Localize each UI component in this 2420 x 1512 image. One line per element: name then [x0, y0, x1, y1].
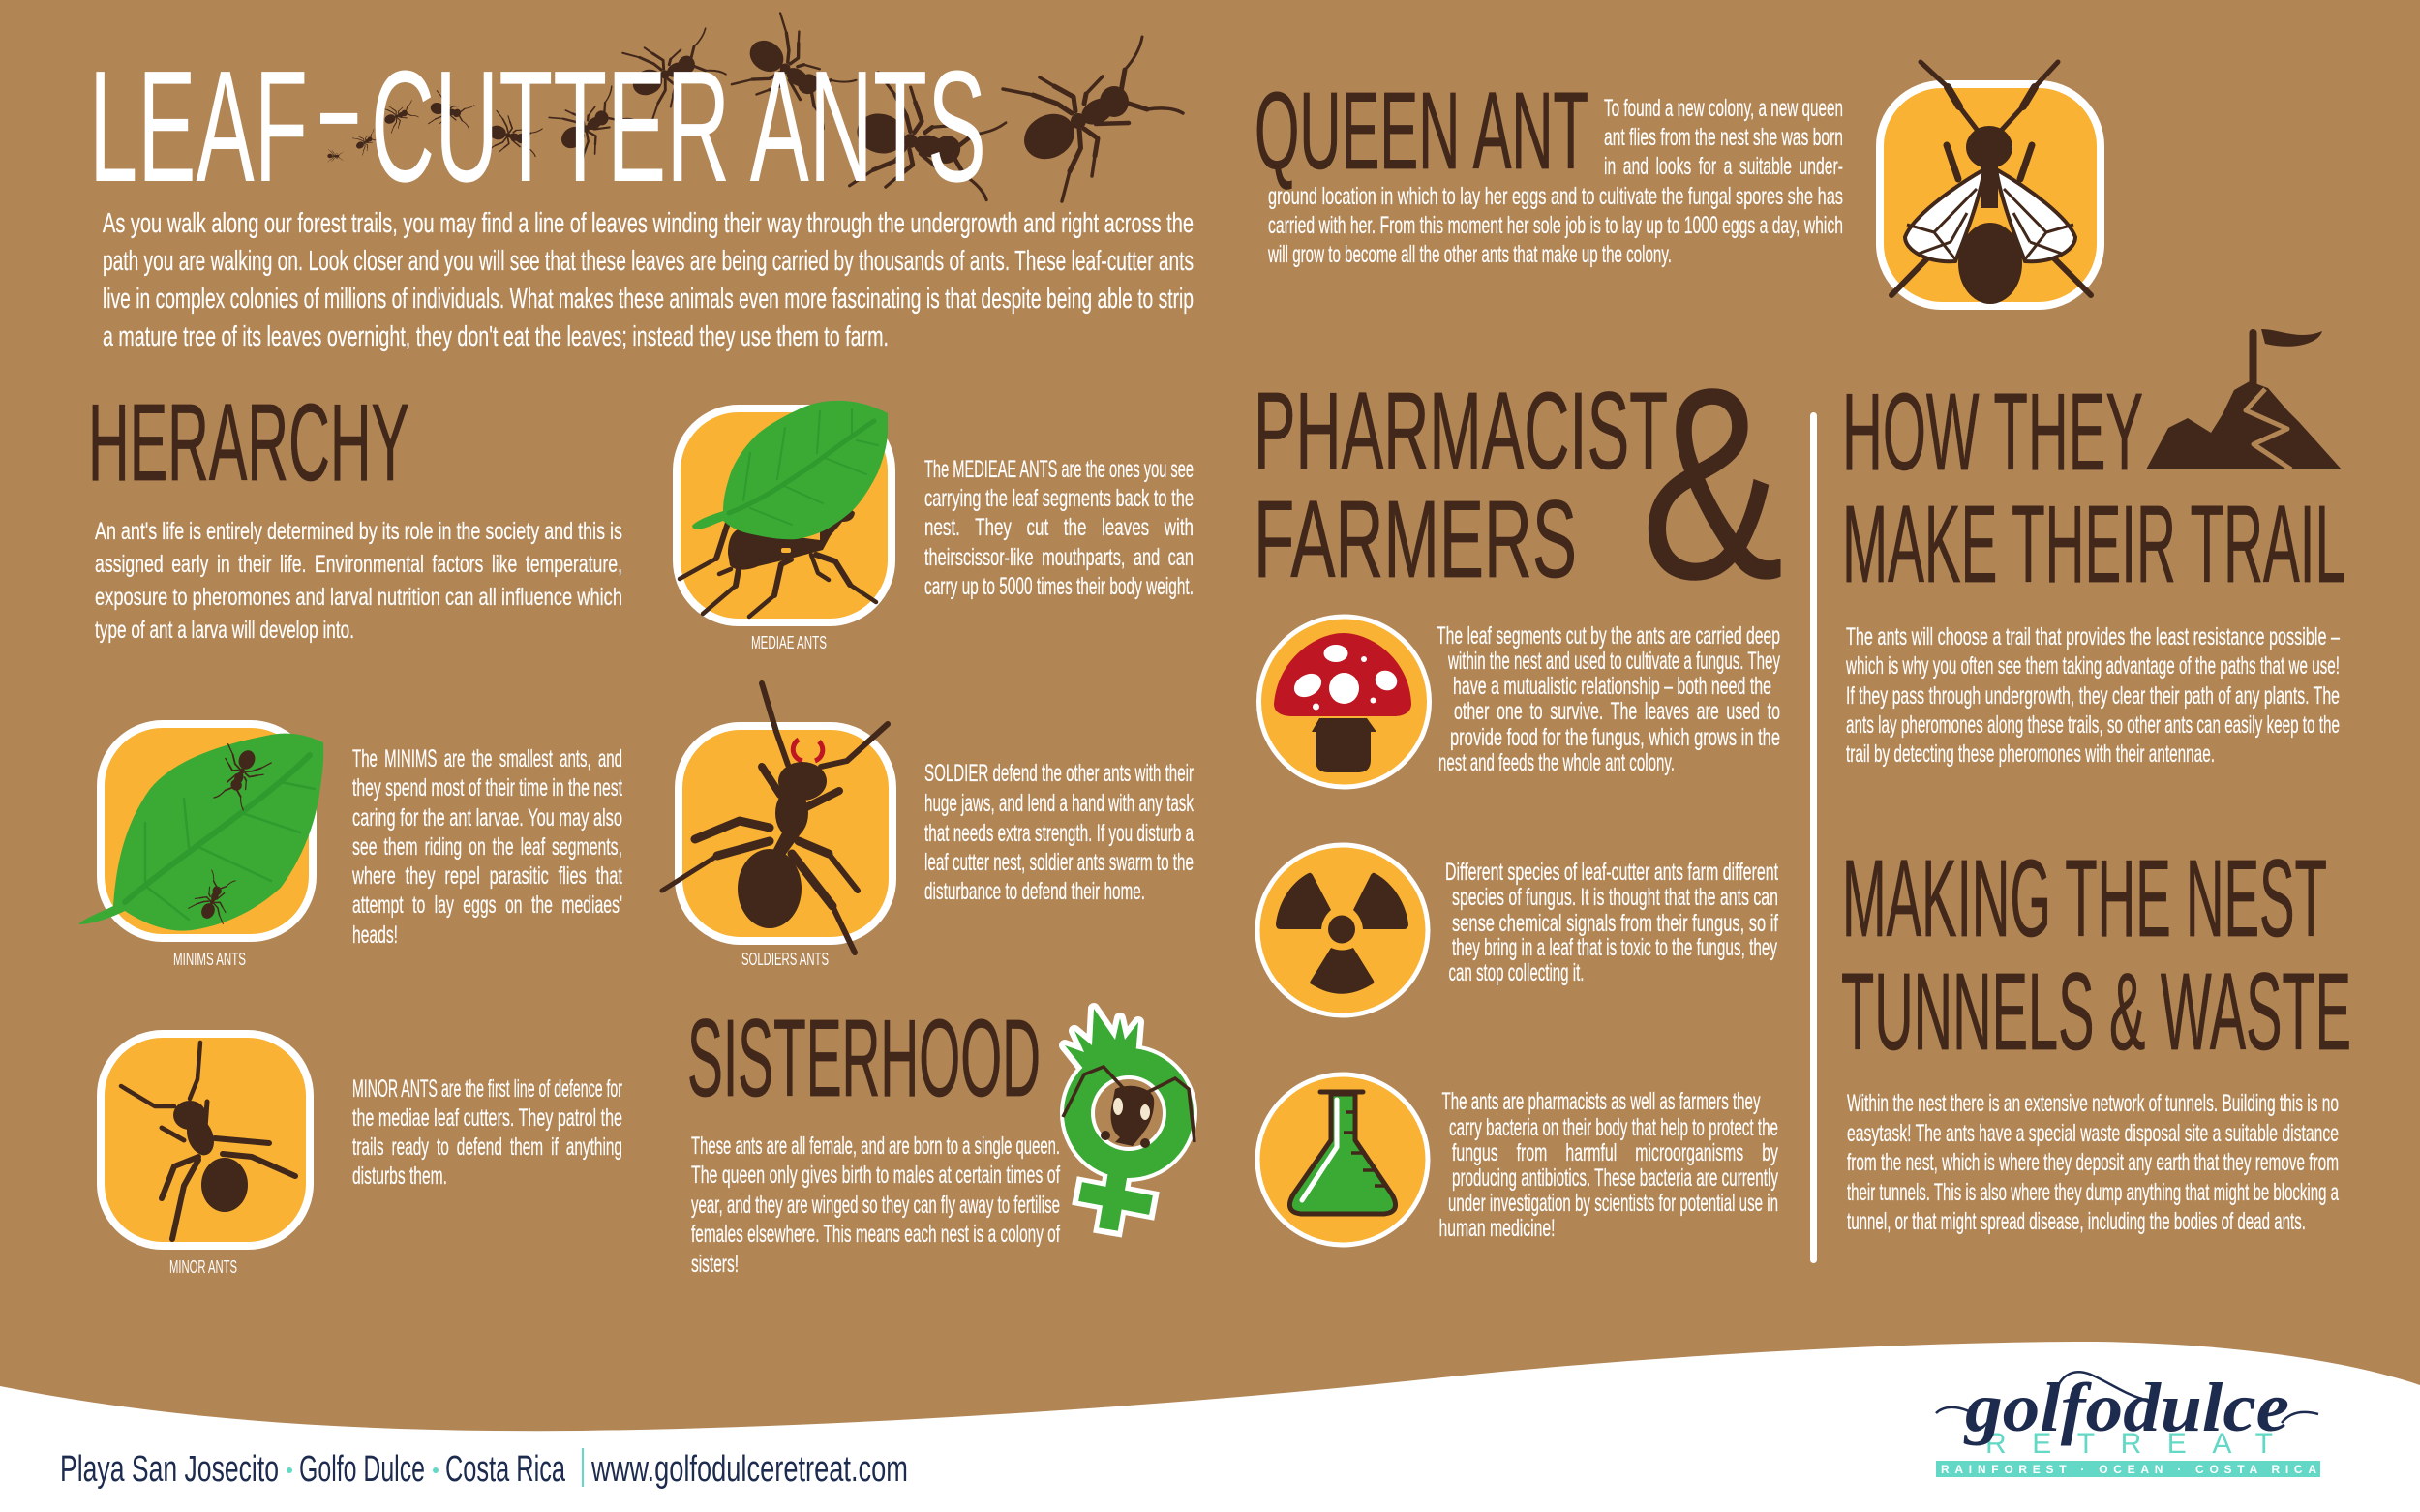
- soldier text: [924, 760, 1194, 905]
- minor text: [352, 1075, 622, 1190]
- minims text: where they repel parasitic flies that: [351, 862, 622, 890]
- icon: winged queen ant: [1880, 62, 2101, 306]
- footer contact line: Costa Rica: [445, 1449, 566, 1490]
- mediae text: nest. They cut the leaves with: [924, 514, 1194, 541]
- label: minor ants: MINOR ANTS: [169, 1257, 237, 1277]
- intro paragraph: As you walk along our forest trails, you may find a line of leaves winding their way through the undergrowth and right across the: [103, 208, 1194, 239]
- panel: queen ant: [1255, 62, 2101, 306]
- sisterhood text: sisters!: [691, 1251, 739, 1278]
- species text: species of fungus. It is thought that the ants can: [1452, 884, 1778, 911]
- label: mediae ants: MEDIAE ANTS: [751, 633, 827, 652]
- intro paragraph: live in complex colonies of millions of individuals. What makes these animals even more fascinating is that despite being able to strip: [103, 284, 1194, 315]
- icon: mountain with flag: [2146, 329, 2342, 469]
- panel: minims ants: [78, 724, 622, 969]
- minims text: [351, 745, 622, 949]
- label: minims ants: MINIMS ANTS: [173, 950, 246, 969]
- heading: queen ant: QUEEN ANT: [1255, 70, 1588, 192]
- heading: pharmacist farmers: [1254, 330, 1784, 636]
- footer contact line: [60, 1448, 908, 1490]
- fungus text: other one to survive. The leaves are used to: [1454, 698, 1780, 725]
- minims text: attempt to lay eggs on the mediaes': [352, 892, 622, 919]
- queen text: ground location in which to lay her eggs and to cultivate the fungal spores she has: [1268, 183, 1843, 210]
- logo: golfo dulce retreat: [1936, 1369, 2320, 1477]
- queen text: in and looks for a suitable under-: [1604, 153, 1843, 180]
- fungus text: nest and feeds the whole ant colony.: [1438, 749, 1675, 776]
- panel: sisterhood: SISTERHOOD: [687, 997, 1041, 1119]
- minor text: the mediae leaf cutters. They patrol the: [352, 1104, 622, 1132]
- hierarchy text: type of ant a larva will develop into.: [95, 617, 354, 644]
- species text: they bring in a leaf that is toxic to the fungus, they: [1452, 934, 1777, 961]
- mediae text: carrying the leaf segments back to the: [924, 485, 1194, 512]
- queen text: ant flies from the nest she was born: [1604, 124, 1843, 151]
- sisterhood text: [691, 1133, 1060, 1278]
- pharmacist text: [1438, 1088, 1778, 1242]
- fungus text: The leaf segments cut by the ants are carried deep: [1437, 622, 1780, 650]
- logo: golfo dulce retreat: RAINFOREST · OCEAN · COSTA RICA: [1941, 1463, 2316, 1476]
- hierarchy text: [95, 518, 622, 644]
- title: LEAF: [89, 38, 308, 215]
- panel: how they make their trail: [1842, 329, 2345, 768]
- mediae text: [924, 456, 1194, 600]
- soldier text: disturbance to defend their home.: [924, 878, 1145, 905]
- icon: female symbol with ant: [1063, 1009, 1195, 1235]
- pharmacist text: under investigation by scientists for potential use in: [1448, 1190, 1778, 1217]
- pharmacist text: fungus from harmful microorganisms by: [1452, 1139, 1778, 1166]
- decorative ant trail: [322, 0, 1183, 260]
- heading: pharmacist farmers: PHARMACIST: [1254, 370, 1668, 492]
- queen text: will grow to become all the other ants that make up the colony.: [1267, 241, 1672, 268]
- trail text: [1845, 623, 2340, 768]
- footer contact line: Playa San Josecito: [60, 1449, 279, 1490]
- fungus text: within the nest and used to cultivate a fungus. They: [1447, 648, 1780, 675]
- icon: soldier ant: [662, 683, 892, 953]
- mediae text: The MEDIEAE ANTS are the ones you see: [924, 456, 1194, 483]
- title: –: [320, 15, 357, 193]
- sisterhood text: These ants are all female, and are born to a single queen.: [691, 1133, 1060, 1160]
- sisterhood text: year, and they are winged so they can fly away to fertilise: [691, 1192, 1060, 1219]
- pharmacist text: human medicine!: [1438, 1215, 1555, 1242]
- panel: mediae ants: [677, 401, 1194, 652]
- nest text: [1847, 1090, 2339, 1235]
- minor text: trails ready to defend them if anything: [352, 1134, 622, 1161]
- fungus text: provide food for the fungus, which grows in the: [1450, 724, 1780, 751]
- title: CUTTER ANTS: [371, 38, 986, 215]
- intro paragraph: a mature tree of its leaves overnight, they don't eat the leaves; instead they use them to farm.: [103, 321, 889, 352]
- panel: sisterhood: [687, 997, 1195, 1278]
- mediae text: theirscissor-like mouthparts, and can: [924, 544, 1194, 571]
- icon: mushroom: [1258, 617, 1429, 787]
- logo: golfo dulce retreat: golfodulce: [1963, 1369, 2289, 1446]
- hierarchy text: exposure to pheromones and larval nutrition can all influence which: [95, 584, 622, 611]
- species text: can stop collecting it.: [1448, 959, 1584, 986]
- title: [89, 15, 986, 215]
- icon: minor ant: [101, 1034, 310, 1246]
- sisterhood text: The queen only gives birth to males at certain times of: [691, 1162, 1060, 1189]
- heading: hierarchy: HERARCHY: [88, 381, 409, 503]
- heading: pharmacist farmers: &: [1641, 330, 1784, 636]
- intro paragraph: path you are walking on. Look closer and you will see that these leaves are being carried by thousands of ants. These leaf-cutter ants: [103, 246, 1194, 277]
- soldier text: leaf cutter nest, soldier ants swarm to the: [924, 849, 1194, 876]
- minims text: The MINIMS are the smallest ants, and: [352, 745, 622, 772]
- minims text: they spend most of their time in the nest: [352, 774, 622, 801]
- icon: mediae ant with leaf: [677, 401, 892, 622]
- footer contact line: Golfo Dulce: [299, 1449, 425, 1490]
- panel: pharmacist and farmers: [1254, 330, 1784, 1245]
- footer white wave: [0, 1342, 2420, 1512]
- vertical divider: [1810, 412, 1817, 1263]
- fungus text: have a mutualistic relationship – both need the: [1453, 673, 1771, 700]
- pharmacist text: The ants are pharmacists as well as farmers they: [1442, 1088, 1761, 1115]
- hierarchy text: An ant's life is entirely determined by its role in the society and this is: [95, 518, 622, 545]
- minor text: MINOR ANTS are the first line of defence for: [352, 1075, 622, 1103]
- panel: making the nest: [1841, 837, 2351, 1235]
- mediae text: carry up to 5000 times their body weight.: [924, 573, 1194, 600]
- heading: how they make their trail: [1842, 371, 2345, 605]
- logo: golfo dulce retreat: RETREAT: [1985, 1428, 2273, 1460]
- queen text: carried with her. From this moment her sole job is to lay up to 1000 eggs a day, which: [1268, 212, 1843, 239]
- species text: [1445, 859, 1778, 986]
- icon: minims ants on leaf: [78, 724, 323, 938]
- panel: minor ants: [101, 1034, 622, 1277]
- hierarchy text: assigned early in their life. Environmental factors like temperature,: [95, 551, 622, 578]
- species text: Different species of leaf-cutter ants farm different: [1445, 859, 1778, 886]
- label: soldiers ants: SOLDIERS ANTS: [741, 950, 829, 969]
- pharmacist text: carry bacteria on their body that help to protect the: [1449, 1114, 1778, 1141]
- heading: how they make their trail: HOW THEY: [1842, 371, 2143, 493]
- minims text: heads!: [352, 922, 398, 949]
- panel: soldier ants: [662, 683, 1194, 969]
- sisterhood text: females elsewhere. This means each nest is a colony of: [691, 1221, 1060, 1248]
- soldier text: SOLDIER defend the other ants with their: [924, 760, 1194, 787]
- species text: sense chemical signals from their fungus, so if: [1452, 910, 1778, 937]
- fungus text: [1437, 622, 1780, 776]
- heading: making the nest: [1841, 837, 2351, 1073]
- heading: pharmacist farmers: FARMERS: [1254, 478, 1577, 600]
- minor text: disturbs them.: [352, 1163, 447, 1190]
- minims text: caring for the ant larvae. You may also: [352, 804, 622, 832]
- icon: flask: [1257, 1074, 1428, 1245]
- intro paragraph: [103, 208, 1194, 352]
- soldier text: that needs extra strength. If you disturb a: [924, 820, 1194, 847]
- minims text: see them riding on the leaf segments,: [352, 833, 622, 861]
- queen text: [1267, 95, 1843, 268]
- panel: hierarchy: [88, 381, 622, 644]
- footer contact line: www.golfodulceretreat.com: [590, 1449, 908, 1490]
- soldier text: huge jaws, and lend a hand with any task: [924, 790, 1194, 817]
- icon: radiation: [1257, 845, 1428, 1015]
- queen text: To found a new colony, a new queen: [1604, 95, 1843, 122]
- pharmacist text: producing antibiotics. These bacteria are currently: [1452, 1164, 1778, 1192]
